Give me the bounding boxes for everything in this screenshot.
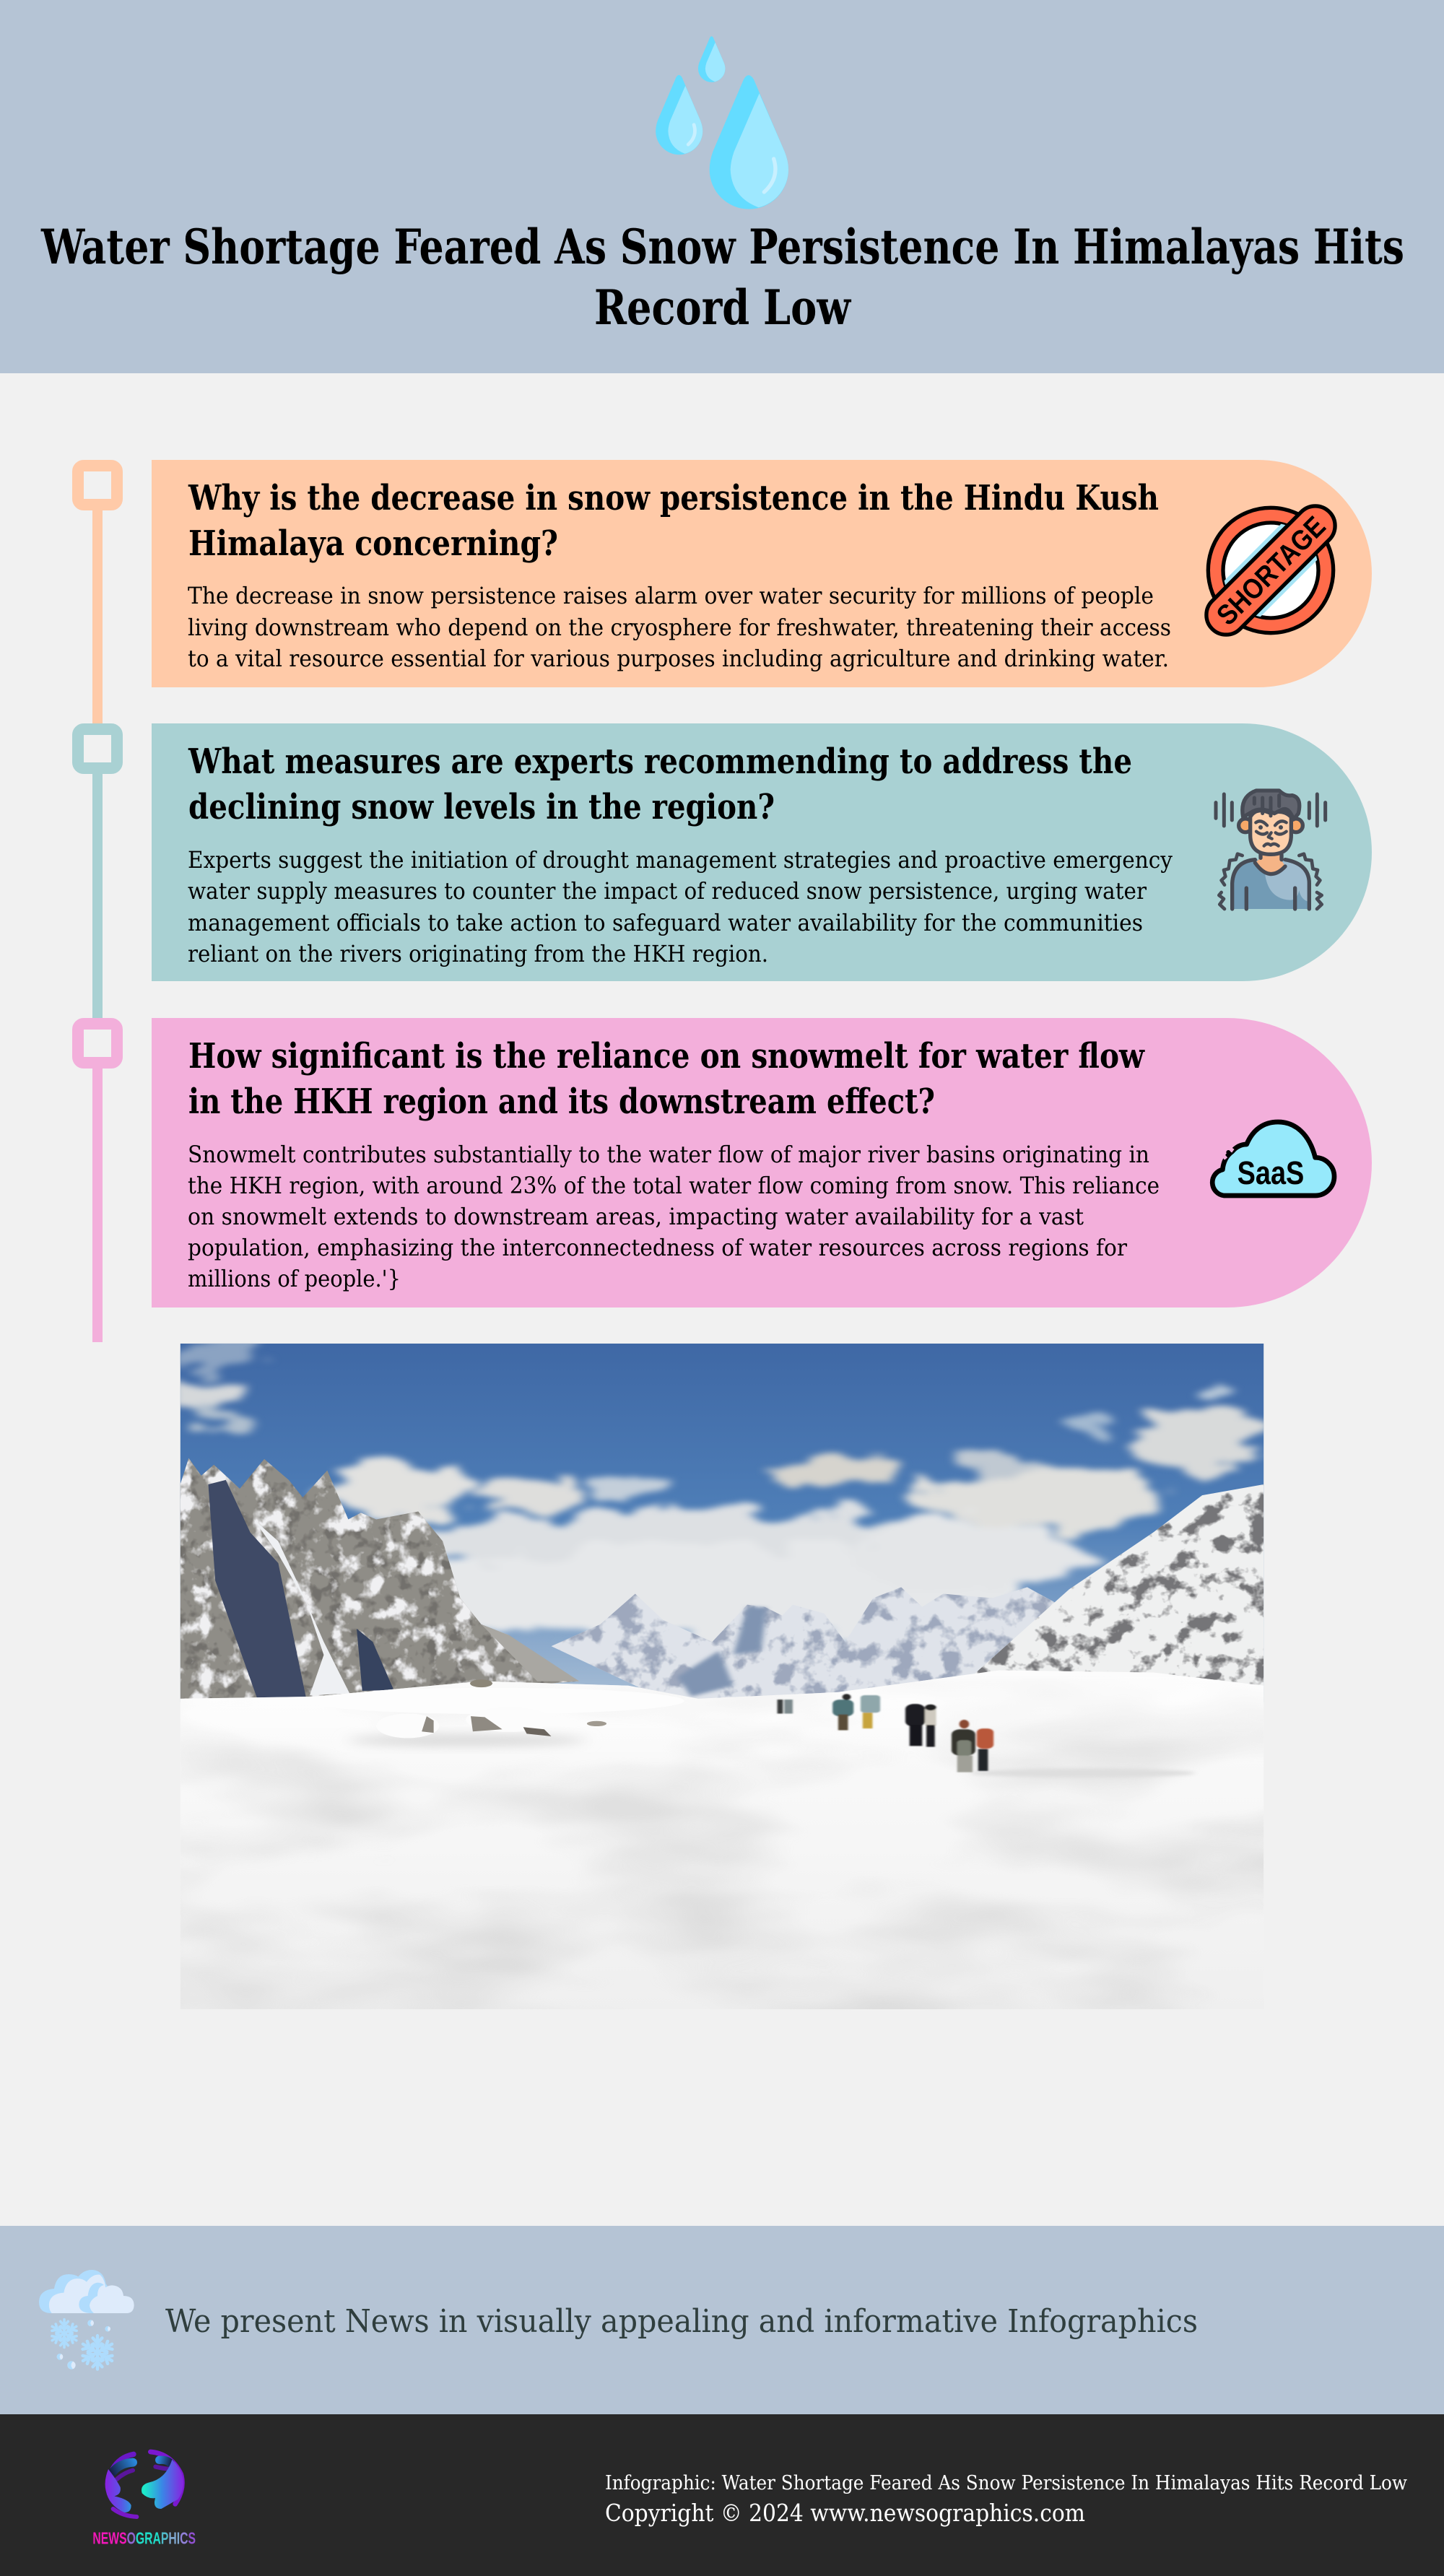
text: card 3 body: on snowmelt extends to downstream areas, impacting water availability for a vast: [188, 1203, 1084, 1230]
heading: card 2: declining snow levels in the region?: [188, 787, 775, 827]
logo: Newsographics: [92, 2452, 196, 2547]
timeline marker 1: [78, 466, 117, 729]
text: card 3 body: Snowmelt contributes substantially to the water flow of major river basins originating in: [188, 1141, 1149, 1168]
panel: measures recommended by experts: [152, 723, 1372, 981]
photo: trekkers on a Himalayan snowfield: [156, 1336, 1293, 2018]
text: card 1 body: to a vital resource essential for various purposes including agriculture and drinking water.: [188, 645, 1169, 672]
title: [40, 219, 1404, 336]
text: card 3 body: millions of people.'}: [188, 1265, 401, 1292]
text: card 2 body: Experts suggest the initiation of drought management strategies and proactive emergency: [188, 846, 1173, 874]
heading: card 2: What measures are experts recommending to address the: [188, 741, 1132, 782]
icon: shortage sign: SHORTAGE: [1211, 510, 1332, 632]
text: card 2 body: water supply measures to counter the impact of reduced snow persistence, urging water: [188, 877, 1147, 905]
icon: SaaS cloud: SaaS: [1238, 1154, 1304, 1191]
footer dark band: [0, 2414, 1444, 2576]
header panel: [0, 0, 1444, 373]
trekkers: [778, 1694, 993, 1772]
heading: card 1: Why is the decrease in snow persistence in the Hindu Kush: [188, 478, 1159, 518]
icon: snow cloud: [39, 2270, 134, 2370]
text: card 1 body: [188, 582, 1171, 672]
copyright line: Copyright © 2024 www.newsographics.com: [605, 2499, 1085, 2527]
text: card 3 body: [188, 1141, 1160, 1292]
icon: water drops: [656, 36, 788, 209]
icon: SaaS cloud: [1212, 1122, 1334, 1196]
text: card 2 body: [188, 846, 1173, 967]
heading: card 3: How significant is the reliance on snowmelt for water flow: [188, 1036, 1145, 1076]
snow field: [180, 1671, 1264, 1754]
heading: card 3: in the HKH region and its downstream effect?: [188, 1082, 935, 1122]
heading: card 1: [188, 478, 1159, 564]
clouds: [156, 1336, 1265, 1642]
logo: Newsographics: NEWSOGRAPHICS: [92, 2528, 196, 2547]
distant peaks: [551, 1587, 1083, 1699]
text: card 1 body: living downstream who depend on the cryosphere for freshwater, threatening their access: [188, 614, 1171, 641]
icon: worried person: [1216, 791, 1326, 909]
text: card 2 body: reliant on the rivers originating from the HKH region.: [188, 940, 768, 967]
tagline: We present News in visually appealing and informative Infographics: [165, 2303, 1198, 2340]
text: card 1 body: The decrease in snow persistence raises alarm over water security for millions of people: [188, 582, 1154, 609]
panel: reliance on snowmelt: [152, 1018, 1372, 1307]
title: Record Low: [594, 279, 852, 336]
panel: why the decrease is concerning: [152, 460, 1372, 687]
timeline marker 3: [78, 1024, 117, 1342]
text: card 3 body: the HKH region, with around 23% of the total water flow coming from snow. This reliance: [188, 1172, 1160, 1199]
text: card 3 body: population, emphasizing the interconnectedness of water resources across regions for: [188, 1234, 1128, 1261]
heading: card 2: [188, 741, 1132, 827]
heading: card 3: [188, 1036, 1145, 1122]
text: card 2 body: management officials to take action to safeguard water availability for the communities: [188, 909, 1143, 936]
rocks in snow: [376, 1679, 606, 1738]
left massif: [180, 1458, 579, 1701]
right mountain: [971, 1484, 1264, 1688]
footer tagline band: [0, 2226, 1444, 2414]
timeline marker 2: [78, 729, 117, 1022]
snow drifts: [173, 1677, 1293, 2018]
heading: card 1: Himalaya concerning?: [188, 523, 558, 564]
